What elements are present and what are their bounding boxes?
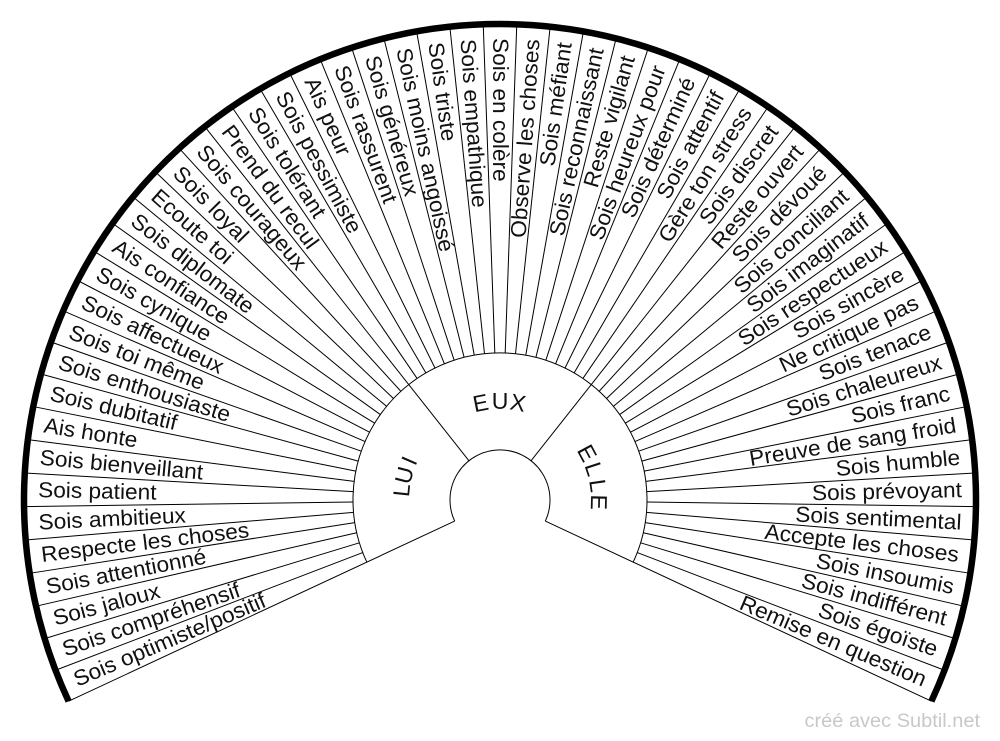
label: Sois ambitieux bbox=[38, 503, 186, 535]
label: Ais honte bbox=[42, 413, 139, 452]
label: Sois enthousiaste bbox=[56, 350, 234, 427]
label: Ecoute toi bbox=[147, 184, 238, 269]
label: Sois pessimiste bbox=[271, 87, 367, 237]
label: Sois attentif bbox=[652, 86, 730, 203]
label: Sois empathique bbox=[456, 38, 492, 208]
label: Ais confiance bbox=[108, 234, 234, 329]
category: LUI bbox=[388, 453, 422, 498]
label: Sois sentimental bbox=[795, 502, 962, 535]
label: Sois déterminé bbox=[616, 73, 700, 221]
label: Sois en colère bbox=[488, 38, 513, 182]
label: Sois toi même bbox=[66, 320, 208, 395]
label: Sois moins angoissé bbox=[391, 46, 459, 254]
label: Sois tenace bbox=[815, 320, 934, 386]
label: Sois optimiste/positif bbox=[70, 588, 270, 691]
category: ELLE: E bbox=[572, 440, 602, 466]
category: ELLE bbox=[572, 440, 612, 510]
category: ELLE: E bbox=[586, 494, 612, 510]
label: Sois insoumis bbox=[814, 548, 956, 599]
category: EUX bbox=[471, 388, 528, 417]
label: Sois diplomate bbox=[126, 209, 259, 319]
label: Sois prévoyant bbox=[812, 477, 963, 505]
label: Sois conciliant bbox=[729, 183, 854, 298]
label: Ne critique pas bbox=[775, 290, 922, 377]
label: Sois heureux pour bbox=[584, 61, 671, 243]
label: Sois compréhensif bbox=[59, 577, 244, 661]
label: Sois respectueux bbox=[733, 234, 892, 351]
label: Sois tolérant bbox=[243, 103, 332, 223]
label: Preuve de sang froid bbox=[747, 413, 958, 471]
label: Sois franc bbox=[849, 381, 952, 428]
category: LUI: L bbox=[388, 482, 415, 498]
label: Sois reconnaissant bbox=[544, 45, 609, 238]
label: Sois sincère bbox=[789, 262, 908, 344]
label: Reste vigilant bbox=[578, 52, 640, 190]
label: Gère ton stress bbox=[653, 103, 757, 247]
label: Sois dévoué bbox=[727, 161, 832, 267]
label: Sois généreux bbox=[360, 53, 424, 199]
label: Sois imaginatif bbox=[742, 208, 874, 318]
label: Respecte les choses bbox=[40, 518, 250, 567]
category: ELLE: L bbox=[580, 459, 608, 479]
label: Sois cynique bbox=[92, 262, 216, 346]
label: Sois affectueux bbox=[78, 290, 228, 379]
label: Sois humble bbox=[835, 445, 961, 481]
label: Sois patient bbox=[38, 477, 158, 505]
label: Sois loyal bbox=[168, 161, 254, 248]
label: Observe les choses bbox=[506, 38, 544, 239]
label: Sois dubitatif bbox=[48, 381, 180, 435]
label: Sois discret bbox=[694, 120, 784, 229]
label: Prend du recul bbox=[217, 120, 324, 254]
credit: créé avec Subtil.net bbox=[805, 710, 981, 732]
label: Ais peur bbox=[300, 73, 356, 160]
label: Sois chaleureux bbox=[783, 350, 944, 422]
label: Sois indifférent bbox=[799, 568, 950, 631]
central hole arc bbox=[450, 450, 550, 521]
category: EUX: U bbox=[492, 388, 508, 414]
label: Sois attentionné bbox=[44, 544, 208, 599]
category: LUI: I bbox=[396, 453, 422, 469]
label: Sois bienveillant bbox=[39, 445, 205, 485]
category: EUX: X bbox=[508, 388, 528, 417]
category: ELLE: L bbox=[584, 478, 612, 494]
label: Accepte les choses bbox=[763, 519, 960, 567]
label: Sois rassurent bbox=[329, 62, 403, 207]
category: EUX: E bbox=[471, 389, 491, 417]
inner category arc bbox=[353, 353, 647, 562]
label: Sois méfiant bbox=[535, 40, 577, 168]
label: Sois triste bbox=[423, 41, 462, 143]
label: Sois égoïste bbox=[815, 598, 941, 661]
label: Reste ouvert bbox=[706, 139, 809, 254]
category: LUI: U bbox=[389, 464, 419, 487]
label: Sois courageux bbox=[192, 140, 312, 275]
label: Remise en question bbox=[736, 591, 930, 691]
label: Sois jaloux bbox=[50, 578, 163, 630]
